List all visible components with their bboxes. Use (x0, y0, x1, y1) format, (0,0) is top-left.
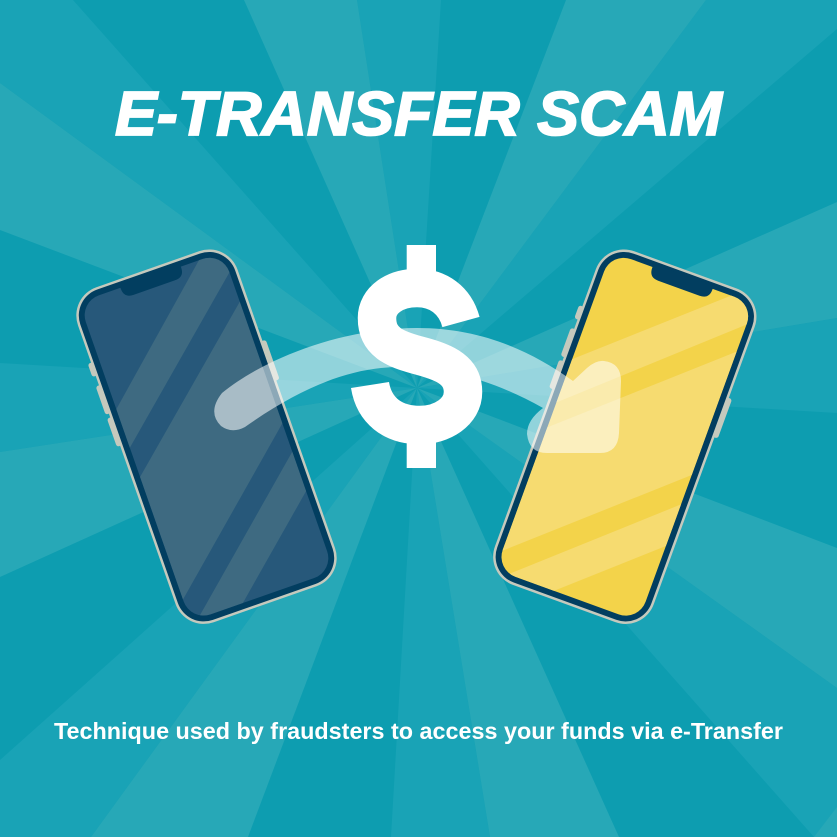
screen reflections (502, 296, 748, 591)
subtitle: Technique used by fraudsters to access your funds via e-Transfer (54, 718, 783, 744)
phone side buttons (549, 305, 744, 448)
arrow: transfer between phones (214, 328, 621, 453)
phone side buttons (88, 306, 283, 447)
phone notch (119, 264, 184, 298)
phone: left dark (76, 250, 337, 624)
icon: dollar sign: $ (354, 231, 479, 483)
title: E-TRANSFER SCAM (115, 80, 723, 149)
phone body (485, 241, 765, 632)
screen reflections (116, 258, 306, 616)
phone body (68, 241, 345, 632)
phone notch (649, 264, 714, 299)
phone: right yellow (493, 250, 756, 624)
